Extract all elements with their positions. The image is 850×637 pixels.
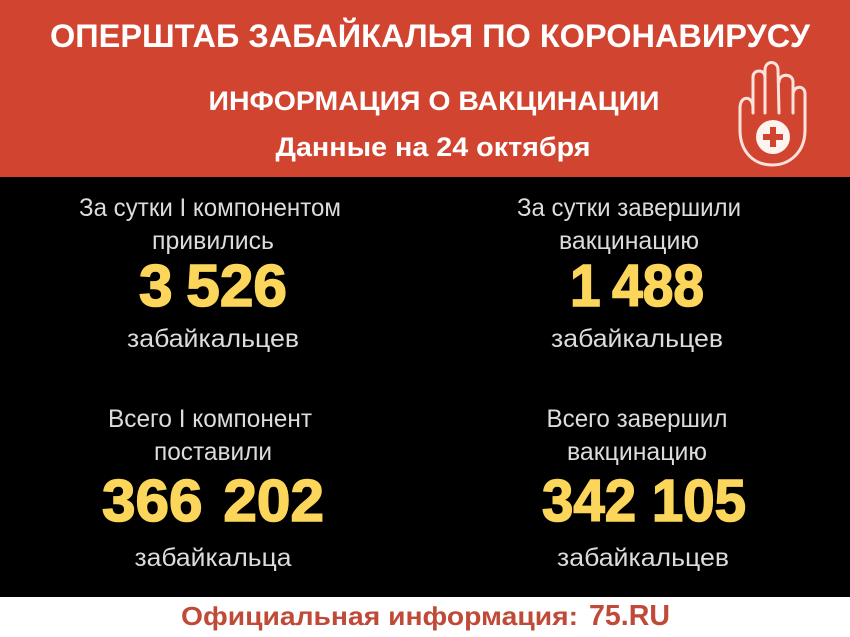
label: Всего I компонент <box>108 405 313 433</box>
number: 366 202 <box>102 468 324 534</box>
unit: забайкальца <box>134 544 292 572</box>
unit: забайкальцев <box>557 544 729 572</box>
subtitle: ИНФОРМАЦИЯ О ВАКЦИНАЦИИ <box>208 86 660 116</box>
number: 342 105 <box>542 468 746 534</box>
panel: daily completed: вакцинацию <box>559 227 699 255</box>
panel: total completed <box>542 405 746 572</box>
label: За сутки I компонентом <box>79 194 341 222</box>
label: За сутки завершили <box>517 194 741 222</box>
panel: total first component: поставили <box>154 438 272 466</box>
panel: header <box>0 0 850 177</box>
icon: hand with medical cross <box>740 62 805 165</box>
panel: daily first component: привились <box>152 227 274 255</box>
panel: total completed: вакцинацию <box>567 438 707 466</box>
panel: footer <box>0 597 850 637</box>
number: 1 488 <box>570 253 704 319</box>
unit: забайкальцев <box>127 325 299 353</box>
date line: Данные на 24 октября <box>276 132 590 162</box>
unit: забайкальцев <box>551 325 723 353</box>
title: ОПЕРШТАБ ЗАБАЙКАЛЬЯ ПО КОРОНАВИРУСУ <box>50 18 811 54</box>
source line: Официальная информация: <box>181 601 578 631</box>
panel: daily first component <box>79 194 341 353</box>
panel: daily completed <box>517 194 741 353</box>
source site: 75.RU <box>589 600 670 632</box>
number: 3 526 <box>139 253 287 319</box>
label: Всего завершил <box>546 405 728 433</box>
panel: total first component <box>102 405 324 572</box>
